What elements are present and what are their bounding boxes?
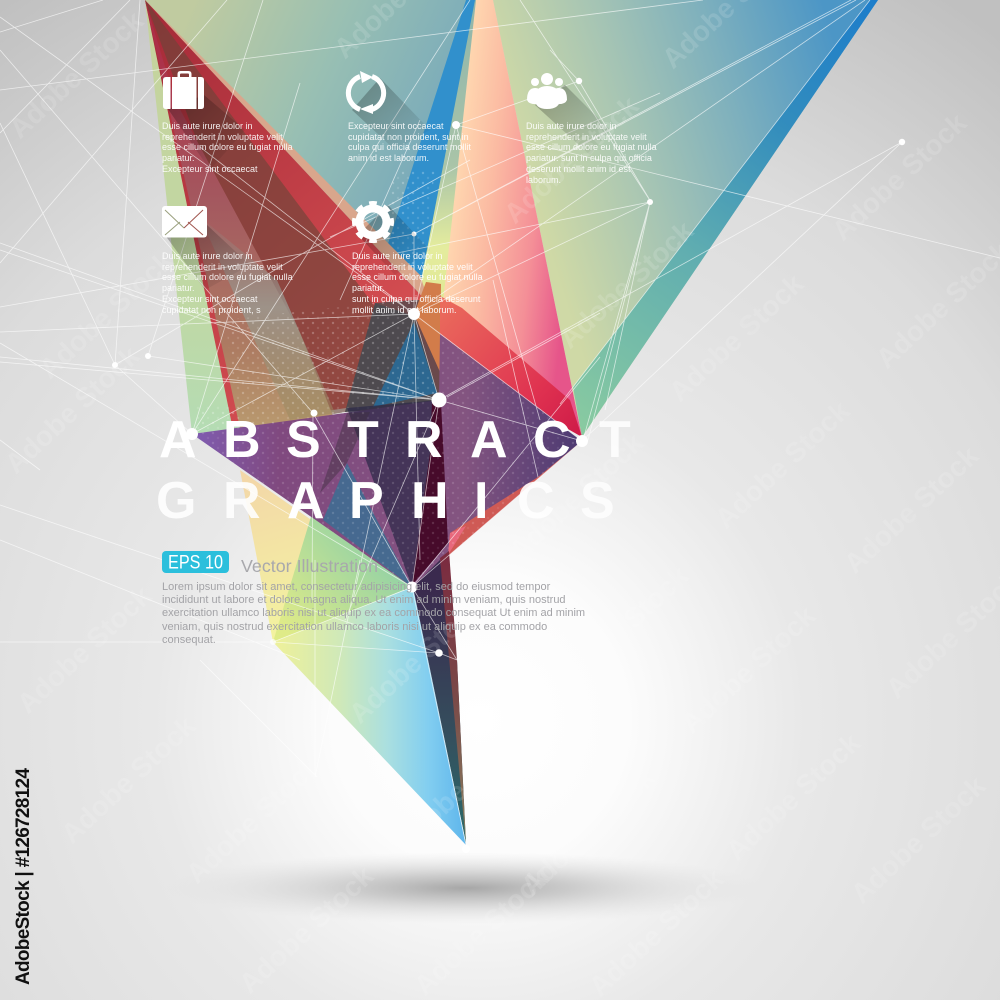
facet: dark band xyxy=(320,412,370,493)
body text: incididunt ut labore et dolore magna aliqua. Ut enim ad minim veniam, quis nostrud xyxy=(162,594,566,606)
title: G xyxy=(156,472,196,530)
watermark text: Adobe Stock xyxy=(498,90,645,229)
facet: right olive panel xyxy=(493,0,878,437)
text block: refresh: Excepteur sint occaecat xyxy=(348,121,444,131)
icon: people group xyxy=(527,73,610,155)
title: R xyxy=(405,411,443,469)
watermark text: Adobe Stock xyxy=(515,762,662,901)
watermark text: Adobe Stock xyxy=(343,590,490,729)
text block: gear: mollit anim id est laborum. xyxy=(352,305,457,315)
watermark text: Adobe Stock xyxy=(503,427,650,566)
text block: gear: pariatur. xyxy=(352,283,385,293)
title xyxy=(156,411,631,530)
text block: gear: sunt in culpa qui officia deserunt xyxy=(352,294,481,304)
watermark text: Adobe Stock xyxy=(838,440,985,579)
text block: gear: Duis aute irure dolor in xyxy=(352,251,443,261)
text block: refresh: cupidatat non proident, sunt in xyxy=(348,132,469,142)
title: C xyxy=(533,411,571,469)
text block: refresh: anim id est laborum. xyxy=(348,153,429,163)
body text: veniam, quis nostrud exercitation ullamco laboris nisi ut aliquip ex ea commodo xyxy=(162,621,547,633)
watermark text: Adobe Stock xyxy=(675,600,822,739)
facet: centre backing xyxy=(345,300,445,412)
abstract polygon sculpture xyxy=(145,0,878,845)
title: A xyxy=(159,411,197,469)
text block: envelope: Duis aute irure dolor in xyxy=(162,251,253,261)
facet: tan band xyxy=(145,0,430,305)
facet: pink notch xyxy=(448,526,466,555)
title: A xyxy=(287,472,325,530)
facet: pale green strip xyxy=(145,0,240,434)
watermark text: Adobe Stock xyxy=(826,107,973,246)
title: H xyxy=(411,472,449,530)
facet: green overlap xyxy=(273,487,412,642)
facet: dark overlap at centre xyxy=(345,303,440,412)
text block: gear: esse cillum dolore eu fugiat nulla xyxy=(352,272,483,282)
ground shadow xyxy=(165,852,765,924)
title: R xyxy=(223,472,261,530)
title: B xyxy=(223,411,261,469)
facet: red base of pink panel xyxy=(440,296,582,437)
facet: mauve wedge xyxy=(145,0,333,428)
icon: gear xyxy=(354,204,430,275)
icon: briefcase xyxy=(163,71,245,170)
title: T xyxy=(599,411,631,469)
facet: grey wedge xyxy=(200,217,335,420)
watermark text: Adobe Stock xyxy=(553,215,700,354)
facet: orange sliver xyxy=(414,282,441,372)
facet: lower indigo tail xyxy=(413,560,466,843)
title: I xyxy=(474,472,488,530)
watermark text: Adobe Stock xyxy=(408,862,555,1000)
text block: envelope: cupidatat non proident, s xyxy=(162,305,261,315)
facet: blue strip xyxy=(370,0,476,300)
title: T xyxy=(347,411,379,469)
facet: blue strip dots xyxy=(370,170,435,300)
badge: EPS 10: EPS 10 xyxy=(168,552,223,574)
title: S xyxy=(286,411,321,469)
body text: Lorem ipsum dolor sit amet, consectetur adipisicing elit, sed do eiusmod tempor xyxy=(162,581,551,593)
facet: purple dots xyxy=(192,334,582,587)
facet: dark indigo centre xyxy=(347,400,439,587)
body text: exercitation ullamco laboris nisi ut aliquip ex ea commodo consequat Ut enim ad minim xyxy=(162,607,585,619)
facet: red lower right xyxy=(412,441,582,587)
subtitle: Vector Illustration xyxy=(241,556,378,576)
facet: yellow strip xyxy=(415,0,477,330)
watermark text: Adobe Stock xyxy=(180,750,327,889)
watermark text: Adobe Stock xyxy=(55,710,202,849)
icon: envelope xyxy=(162,206,250,290)
text block: people: reprehenderit in voluptate velit xyxy=(526,132,647,142)
facet: blue to teal band xyxy=(573,0,878,437)
facet: pink panel xyxy=(440,0,582,437)
facet: dots over green xyxy=(195,405,240,432)
watermark text: Adobe Stock xyxy=(0,340,146,479)
text block: people: laborum. xyxy=(526,175,561,185)
facet: red band xyxy=(145,0,430,425)
text block: briefcase: pariatur. xyxy=(162,153,195,163)
title: C xyxy=(517,472,555,530)
facet: upper teal fan xyxy=(145,0,476,310)
text block: envelope: Excepteur sint occaecat xyxy=(162,294,258,304)
facet: lower gradient blue xyxy=(273,587,466,845)
watermark text: Adobe Stock xyxy=(388,718,535,857)
text block: gear: reprehenderit in voluptate velit xyxy=(352,262,473,272)
watermark text: Adobe Stock xyxy=(548,560,695,699)
text block: briefcase: reprehenderit in voluptate velit xyxy=(162,132,283,142)
text block: envelope: esse cillum dolore eu fugiat nulla xyxy=(162,272,293,282)
text block: people: deserunt mollit anim id est xyxy=(526,164,631,174)
facet: blue triangle xyxy=(373,322,437,407)
text block: people: Duis aute irure dolor in xyxy=(526,121,617,131)
facet: brown region dots xyxy=(225,300,440,428)
watermark text: Adobe Stock xyxy=(845,770,992,909)
text block: refresh: culpa qui officia deserunt mollit xyxy=(348,142,471,152)
title: S xyxy=(580,472,615,530)
body text: consequat. xyxy=(162,634,216,646)
watermark text: Adobe Stock xyxy=(33,245,180,384)
watermark text: Adobe Stock xyxy=(720,727,867,866)
facet: brown overlap xyxy=(145,0,400,420)
watermark text: Adobe Stock xyxy=(663,268,810,407)
text block: people: pariatur. sunt in culpa qui officia xyxy=(526,153,652,163)
watermark text: Adobe Stock xyxy=(583,863,730,1000)
facet: maroon spine xyxy=(412,402,448,585)
text block: people: esse cillum dolore eu fugiat nulla xyxy=(526,142,657,152)
stock id: AdobeStock | #126728124 xyxy=(13,768,34,985)
watermark text: Adobe Stock xyxy=(3,5,150,144)
watermark text: Adobe Stock xyxy=(233,860,380,999)
watermark text: Adobe Stock xyxy=(11,580,158,719)
text block: briefcase: esse cillum dolore eu fugiat nulla xyxy=(162,142,293,152)
text block: envelope: reprehenderit in voluptate velit xyxy=(162,262,283,272)
text block: briefcase: Duis aute irure dolor in xyxy=(162,121,253,131)
title: A xyxy=(470,411,508,469)
facet: purple centre xyxy=(192,334,582,587)
title: P xyxy=(349,472,384,530)
text block: envelope: pariatur. xyxy=(162,283,195,293)
facet: blue wedge xyxy=(323,463,412,587)
facet: yellow lower left xyxy=(240,470,412,642)
text block: briefcase: Excepteur sint occaecat xyxy=(162,164,258,174)
icon: refresh arrows xyxy=(348,71,430,150)
watermark text: Adobe Stock xyxy=(709,395,856,534)
facet: maroon strip xyxy=(440,551,466,845)
network nodes xyxy=(112,78,905,853)
